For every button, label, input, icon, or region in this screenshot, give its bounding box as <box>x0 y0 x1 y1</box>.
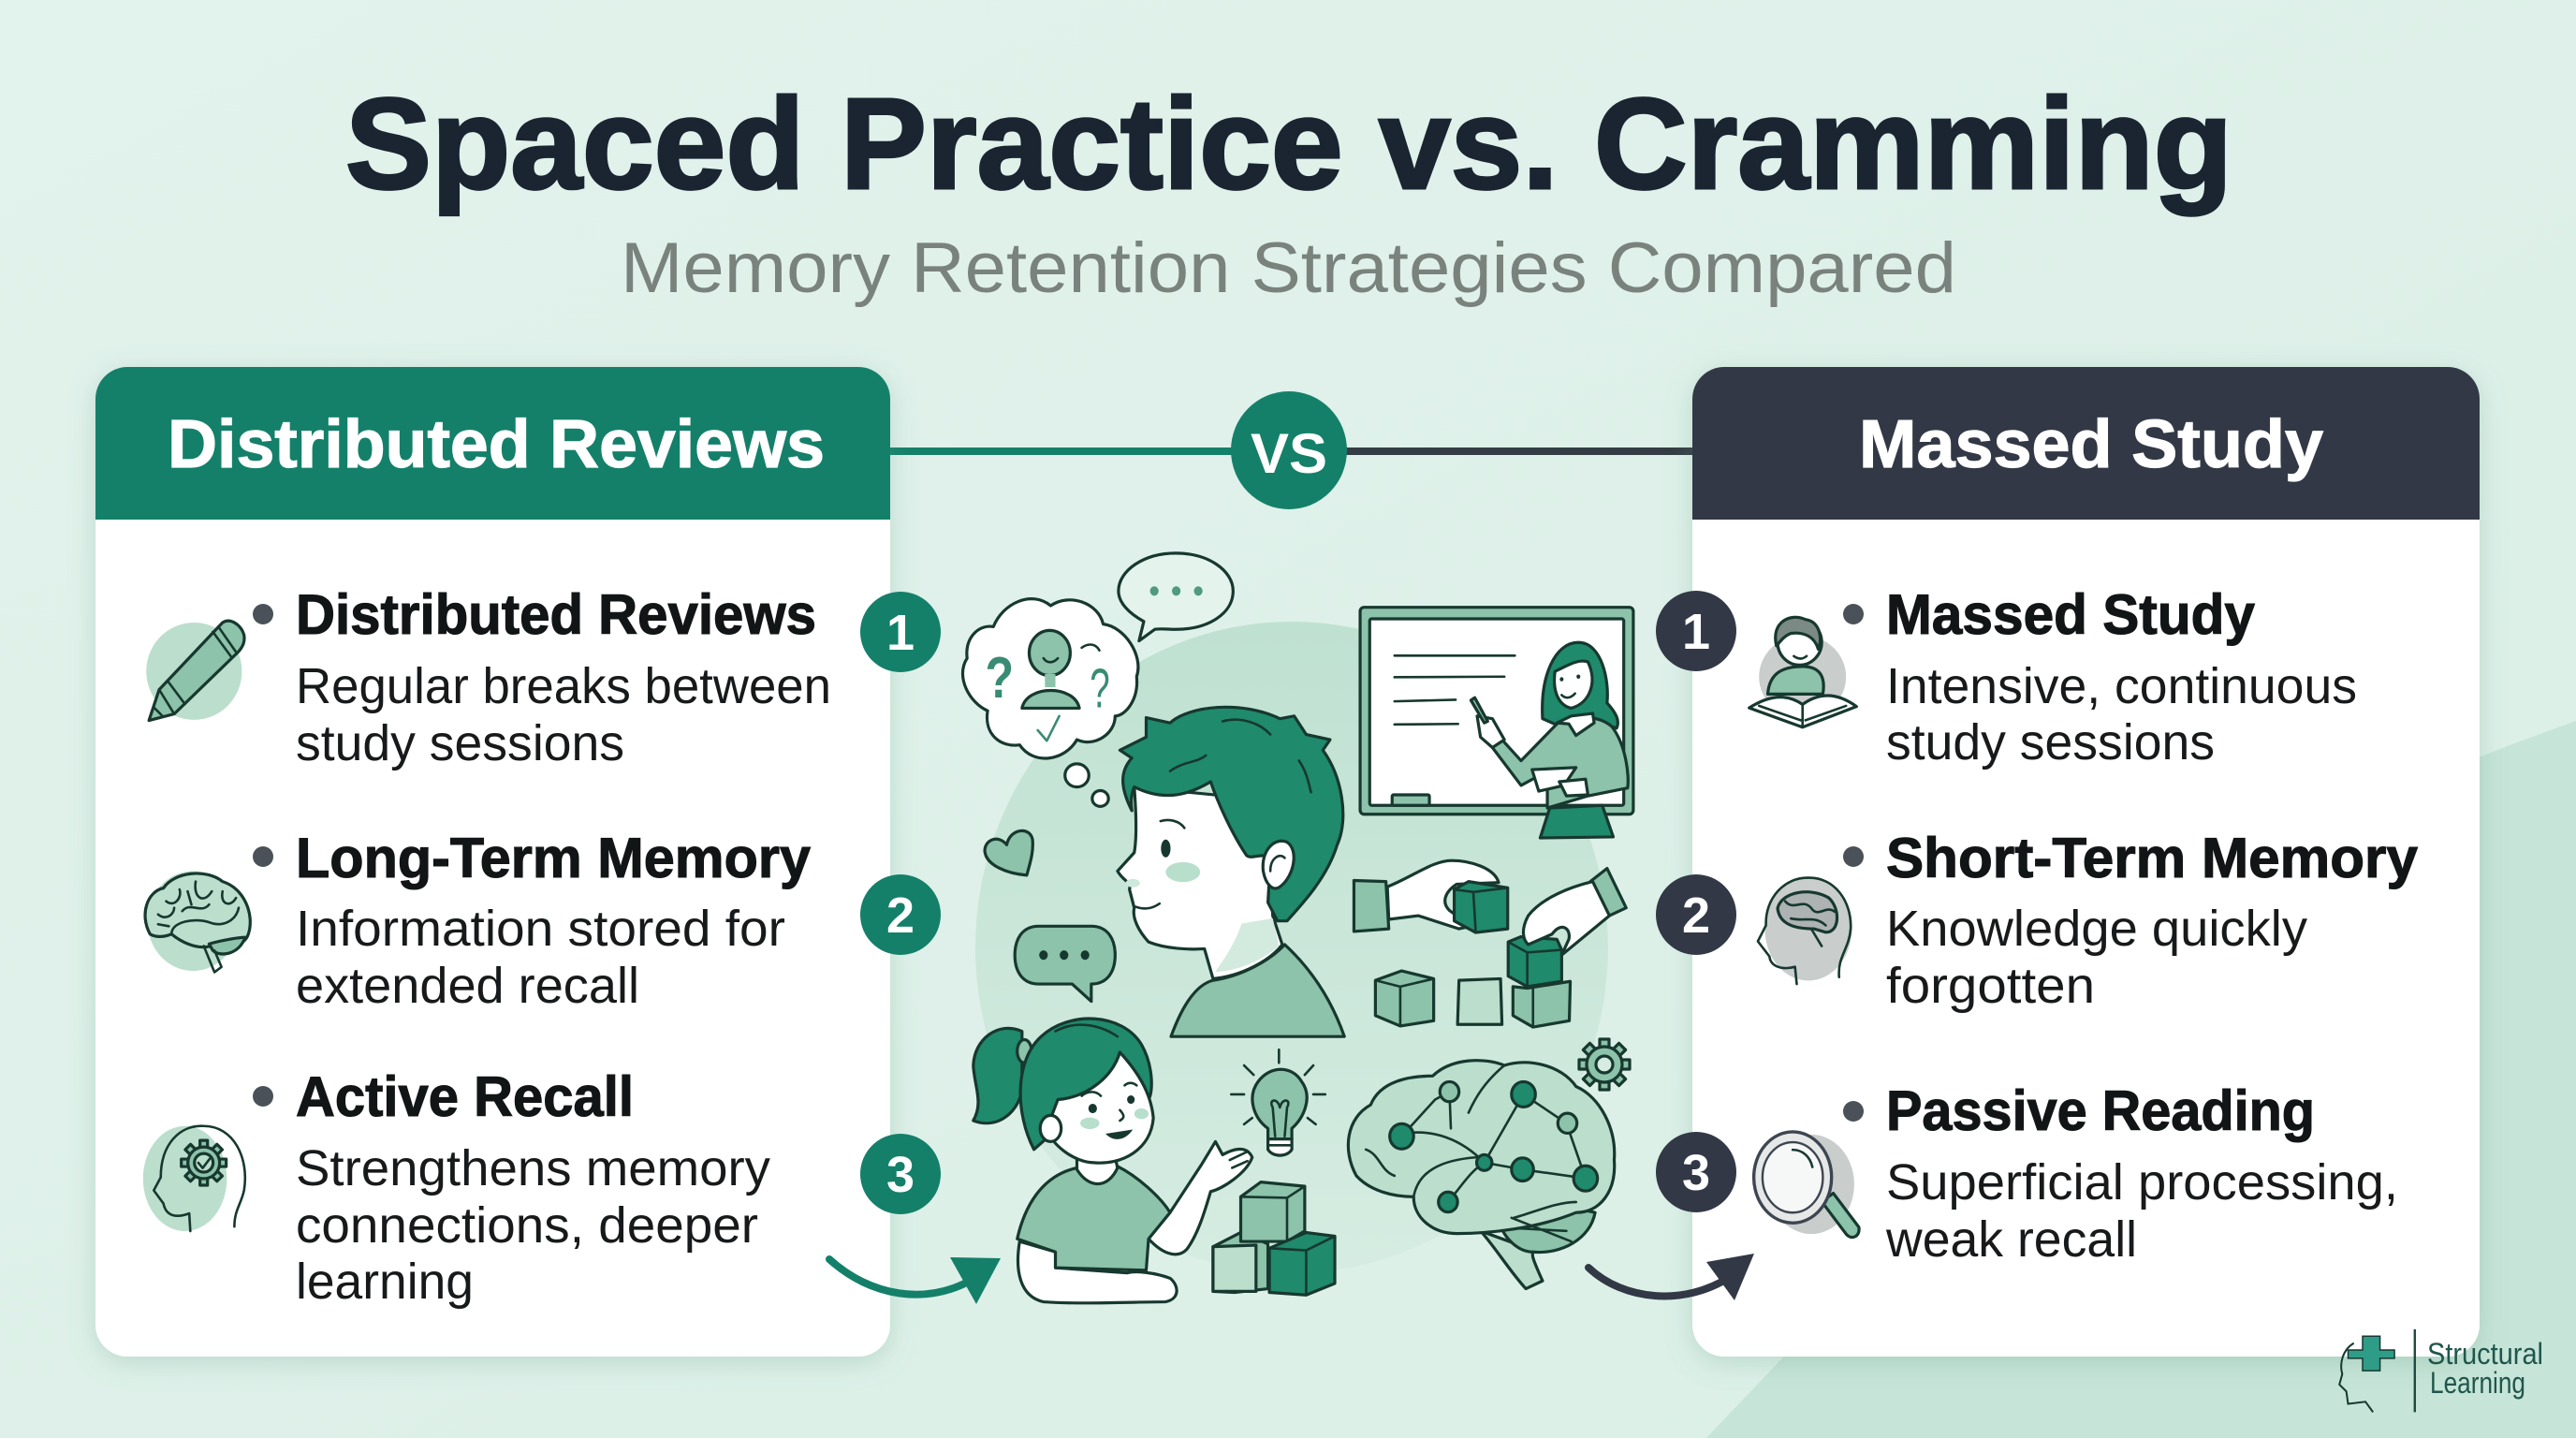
item 3: passive reading <box>1843 1079 2398 1268</box>
panel header: distributed reviews: Distributed Reviews <box>168 407 825 482</box>
number badges: right: 3 <box>1682 1145 1710 1201</box>
vs badge <box>1231 391 1347 509</box>
logo mark <box>2339 1329 2415 1412</box>
arrow: right <box>1588 1254 1754 1300</box>
number badges: left: 1 <box>886 605 915 661</box>
icon: small gear <box>1579 1039 1630 1090</box>
item 2: short-term memory: Short-Term Memory <box>1886 827 2419 889</box>
item 3: passive reading: Superficial processing, <box>1886 1154 2398 1211</box>
item 3: active recall: Active Recall <box>296 1065 634 1128</box>
speech bubble: left <box>1015 926 1115 1002</box>
thought cloud <box>962 599 1138 806</box>
vs connector lines <box>890 448 1692 455</box>
arrow: left <box>829 1257 1001 1304</box>
classroom board with teacher <box>1360 608 1633 838</box>
icon: pencil <box>146 621 244 721</box>
teacher <box>1471 642 1628 838</box>
item 3: passive reading: weak recall <box>1885 1211 2137 1268</box>
item 2: short-term memory: Knowledge quickly <box>1886 901 2307 957</box>
panel header: distributed reviews <box>95 367 890 520</box>
item 2: short-term memory: forgotten <box>1886 958 2095 1014</box>
number badges: right: 1 <box>1682 604 1710 660</box>
item 1: massed study: Intensive, continuous <box>1886 658 2357 714</box>
panel: massed study <box>1692 367 2480 1357</box>
item 1: distributed reviews: Regular breaks between <box>296 658 831 714</box>
item 3: active recall: connections, deeper <box>296 1197 758 1254</box>
icon: head with brain <box>1758 877 1852 984</box>
speech bubble: top <box>1119 553 1233 641</box>
item 1: massed study: study sessions <box>1886 714 2215 770</box>
hands placing blocks <box>1354 860 1626 1027</box>
number badges: right: 2 <box>1682 888 1710 944</box>
centre illustration <box>962 553 1633 1303</box>
icon: brain <box>145 871 250 972</box>
item 3: passive reading: Passive Reading <box>1886 1079 2315 1142</box>
item 1: distributed reviews: study sessions <box>296 715 624 771</box>
subtitle: Memory Retention Strategies Compared <box>621 228 1956 308</box>
item 1: massed study <box>1843 583 2357 770</box>
number badges: right <box>1656 591 1736 1212</box>
item 3: active recall: Strengthens memory <box>296 1140 770 1196</box>
item 2: long-term memory: Long-Term Memory <box>296 827 812 889</box>
item 3: active recall <box>253 1065 770 1310</box>
item 2: long-term memory: Information stored for <box>296 901 785 957</box>
icon: heart <box>985 830 1032 875</box>
number badges: left: 3 <box>886 1147 915 1203</box>
item 2: short-term memory <box>1843 827 2419 1014</box>
boy <box>1118 707 1344 1036</box>
vs badge: VS <box>1251 422 1327 485</box>
item 3: active recall: learning <box>296 1254 474 1310</box>
girl <box>973 1019 1252 1303</box>
icon: head with gear <box>143 1126 245 1231</box>
right panel icons <box>1749 617 1859 1238</box>
number badges: left: 2 <box>886 888 915 944</box>
panel header: massed study <box>1692 367 2480 520</box>
item 2: long-term memory: extended recall <box>296 958 639 1014</box>
logo: structural learning: Learning <box>2430 1366 2525 1400</box>
icon: light bulb <box>1231 1049 1325 1155</box>
centre background disc <box>975 622 1608 1273</box>
brain network <box>1348 1061 1615 1289</box>
left panel icons <box>143 621 250 1231</box>
stacked blocks <box>1213 1182 1335 1295</box>
item 1: massed study: Massed Study <box>1886 583 2256 646</box>
thought cloud: ? <box>986 646 1014 711</box>
logo: structural learning <box>2339 1329 2543 1412</box>
item 1: distributed reviews: Distributed Reviews <box>296 583 816 646</box>
title: Spaced Practice vs. Cramming <box>345 72 2232 216</box>
item 2: long-term memory <box>253 827 812 1014</box>
logo: structural learning: Structural <box>2427 1337 2543 1371</box>
number badges: left <box>860 592 941 1214</box>
icon: child reading book <box>1749 617 1856 727</box>
panel: distributed reviews <box>95 367 890 1357</box>
panel header: massed study: Massed Study <box>1859 407 2323 482</box>
icon: magnifying glass <box>1754 1132 1859 1238</box>
item 1: distributed reviews <box>253 583 831 771</box>
thought cloud: ? <box>1090 657 1110 719</box>
